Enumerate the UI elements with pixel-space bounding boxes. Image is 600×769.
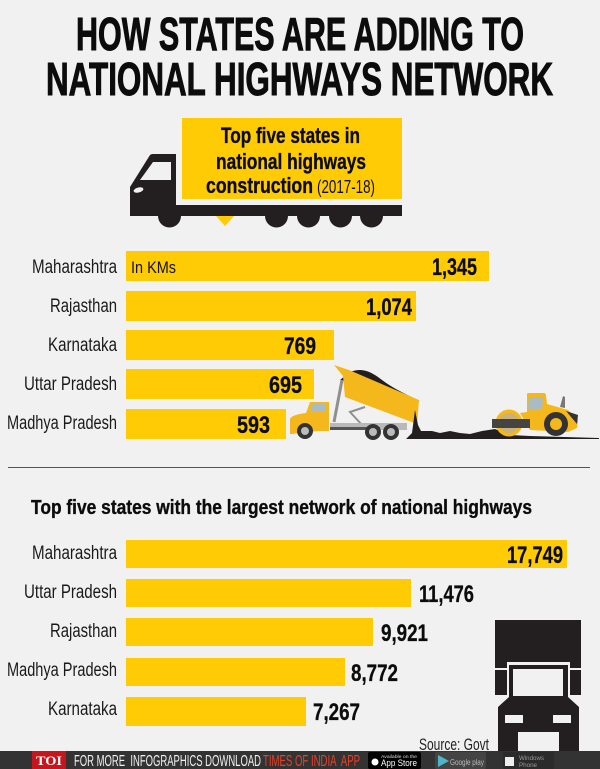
bar chart: construction in 2017-18 — [7, 251, 489, 439]
heading: top five states in construction: (2017-18) — [317, 177, 375, 197]
bar: Madhya Pradesh 593: Madhya Pradesh — [7, 413, 117, 434]
bar: Madhya Pradesh 593: 593 — [237, 412, 270, 439]
bar: Uttar Pradesh 11,476: 11,476 — [419, 581, 474, 608]
bar: Uttar Pradesh 695: 695 — [269, 372, 302, 399]
heading: largest network: Top five states with the largest network of national highways — [31, 497, 532, 519]
bar: Madhya Pradesh 8,772 — [7, 658, 398, 687]
illustration: road roller — [492, 393, 578, 436]
bar: Rajasthan 1,074: Rajasthan — [50, 296, 117, 317]
bar: Uttar Pradesh 695: Uttar Pradesh — [24, 374, 117, 395]
badge: Google play: Google play — [450, 758, 484, 767]
badge: App Store: App Store — [381, 758, 417, 768]
badge: App Store — [368, 752, 421, 769]
bar: Maharashtra 17,749: 17,749 — [507, 542, 563, 569]
logo: TOI — [32, 751, 66, 769]
source note: Source: Govt — [419, 735, 489, 754]
badge: Windows Phone: Phone — [519, 762, 537, 769]
bar: Rajasthan 1,074 — [50, 291, 416, 321]
bar: Karnataka 7,267 — [48, 697, 360, 726]
bar: Madhya Pradesh 8,772: Madhya Pradesh — [7, 660, 117, 681]
badge: Windows Phone — [503, 752, 554, 769]
footer banner — [0, 751, 600, 769]
bar: Uttar Pradesh 11,476 — [24, 579, 474, 608]
bar: Madhya Pradesh 593 — [7, 409, 286, 439]
icon: truck side view with heading — [130, 118, 402, 228]
bar: Uttar Pradesh 11,476: Uttar Pradesh — [24, 582, 117, 603]
bar: Karnataka 769: 769 — [284, 333, 316, 360]
bar: Rajasthan 9,921: Rajasthan — [50, 621, 117, 642]
badge: Windows Phone: Windows — [519, 755, 545, 762]
badge: Google play — [435, 752, 486, 769]
heading: top five states in construction: Top five states in — [221, 123, 360, 148]
bar: Karnataka 7,267: 7,267 — [313, 699, 360, 726]
illustration: asphalt spill on road — [406, 410, 599, 439]
bar: Rajasthan 9,921 — [50, 618, 428, 647]
heading: top five states in construction: construction — [206, 173, 313, 198]
bar chart: largest network — [7, 540, 567, 726]
bar: Rajasthan 1,074: 1,074 — [366, 294, 412, 321]
illustration: dump truck tipping asphalt — [290, 365, 420, 440]
bar: Maharashtra 17,749: Maharashtra — [32, 543, 117, 564]
icon: truck front view — [495, 620, 581, 751]
logo: TOI: TOI — [36, 753, 62, 768]
title — [46, 8, 553, 105]
bar: Uttar Pradesh 695 — [24, 369, 314, 399]
badge: App Store: Available on the — [381, 754, 418, 759]
bar: Karnataka 769 — [48, 330, 334, 360]
heading: top five states in construction: national highways — [216, 149, 366, 174]
bar: Maharashtra 1,345: Maharashtra — [32, 257, 117, 278]
bar: Maharashtra 17,749 — [32, 540, 567, 569]
bar: Maharashtra 1,345: In KMs — [131, 258, 176, 277]
bar: Karnataka 769: Karnataka — [48, 335, 117, 356]
bar: Rajasthan 9,921: 9,921 — [381, 620, 428, 647]
bar: Maharashtra 1,345 — [32, 251, 489, 281]
bar: Karnataka 7,267: Karnataka — [48, 699, 117, 720]
bar: Maharashtra 1,345: 1,345 — [432, 254, 477, 281]
heading: top five states in construction — [206, 123, 375, 198]
bar: Madhya Pradesh 8,772: 8,772 — [351, 660, 398, 687]
